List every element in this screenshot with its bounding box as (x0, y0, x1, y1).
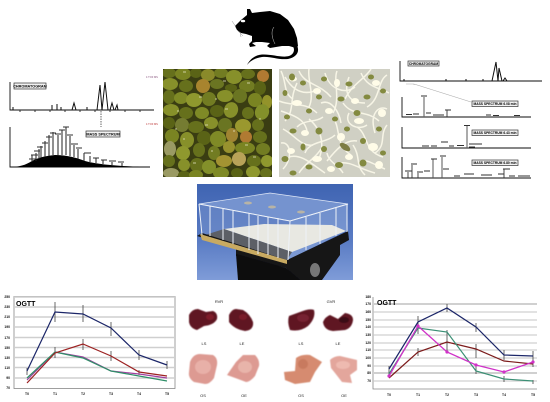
series: magenta (389, 326, 533, 376)
y axis values: 130 (4, 356, 10, 360)
mass spectrum 1 (402, 96, 531, 117)
x axis values: T1 (53, 392, 57, 396)
y axis values: 170 (4, 336, 10, 340)
y axis values: 70 (6, 386, 10, 390)
zoom connector (406, 84, 471, 102)
y axis values: 140 (365, 325, 371, 329)
chromatogram label: CHROMATOGRAM (13, 85, 47, 89)
bean highlights (175, 72, 261, 163)
y axis values: 190 (4, 325, 10, 329)
mass spectrum 2 label (472, 130, 518, 136)
photo: metabolic cage apparatus (197, 184, 353, 280)
error bars (389, 304, 533, 384)
y axis values: 70 (367, 379, 371, 383)
y axis values: 170 (365, 302, 371, 306)
peak to spectrum arrow (100, 111, 102, 127)
x axis values: T0 (387, 393, 391, 397)
right chromatogram trace (400, 61, 542, 81)
plot frame and grid (373, 297, 538, 389)
x axis values: T0 (25, 392, 29, 396)
y axis values: 80 (367, 371, 371, 375)
x axis values: T1 (416, 393, 420, 397)
group labels: OE (241, 393, 247, 398)
error bars (27, 302, 167, 375)
series: navy (27, 312, 167, 371)
chromatogram label (13, 83, 47, 89)
panel: liver photographs (189, 299, 357, 398)
y axis values: 120 (365, 341, 371, 345)
group labels: OS (298, 393, 304, 398)
series: green (389, 328, 533, 381)
x axis values: T3 (474, 393, 478, 397)
y axis values: 110 (366, 348, 371, 352)
mass spectrum label: MASS SPECTRUM (86, 133, 120, 137)
series: green (27, 352, 167, 381)
mass spectrum 1 label (472, 101, 518, 106)
x axis values: T2 (445, 393, 449, 397)
chromatogram trace (10, 82, 154, 112)
group labels: RVR (215, 299, 223, 304)
group labels: LE (240, 341, 245, 346)
mass spectrum 3 label: MASS SPECTRUM 6.80 min (473, 161, 517, 165)
icon: rat silhouette (232, 9, 298, 65)
mass spectrum label (86, 131, 120, 137)
y axis values: 160 (365, 310, 371, 314)
mass spectrum 3 (402, 156, 531, 178)
mass spectrum (10, 127, 150, 167)
y axis values: 110 (5, 366, 10, 370)
group labels: LS (202, 341, 207, 346)
chart title: OGTT (377, 300, 397, 307)
x axis values (25, 392, 169, 396)
series: navy (389, 308, 533, 369)
x axis values: T2 (81, 392, 85, 396)
y axis values: 250 (4, 295, 10, 299)
group labels: LE (336, 341, 341, 346)
group labels (200, 299, 347, 398)
mass spectrum 2 (402, 126, 531, 148)
mass spectrum 3 label (472, 160, 518, 166)
group labels: OS (200, 393, 206, 398)
group labels: OE (341, 393, 347, 398)
y axis values: 150 (365, 318, 371, 322)
panel: left chromatogram (10, 75, 158, 167)
series: purple (27, 352, 167, 380)
pale livers (189, 354, 357, 384)
dark livers (189, 309, 353, 331)
series: dark red (389, 342, 533, 378)
y axis values: 90 (6, 376, 10, 380)
group labels: GVR (327, 299, 335, 304)
y axis values: 230 (4, 305, 10, 309)
chart: right OGTT line chart (365, 295, 538, 397)
peak annotations: 1:TOF MS (146, 75, 158, 79)
y axis values: 90 (367, 364, 371, 368)
y axis values (4, 295, 10, 390)
chart title: OGTT (16, 301, 36, 308)
x axis values: T4 (502, 393, 506, 397)
mass spectrum 1 label: MASS SPECTRUM 6.08 min (473, 102, 517, 106)
photo: mung bean sprouts (279, 69, 390, 177)
chart: left OGTT line chart (4, 295, 175, 396)
peak annotations (146, 75, 158, 126)
panel: right chromatogram and spectra (400, 61, 542, 178)
y axis values: 150 (4, 346, 10, 350)
y axis values: 100 (365, 356, 371, 360)
group labels: LS (299, 341, 304, 346)
plot frame and grid (14, 296, 175, 388)
y axis values: 210 (4, 315, 10, 319)
photo: mung beans (163, 69, 272, 177)
x axis values (387, 393, 535, 397)
series: red (27, 344, 167, 383)
y axis values: 130 (365, 333, 371, 337)
x axis values: T4 (137, 392, 141, 396)
magenta markers (387, 324, 535, 378)
x axis values: T5 (531, 393, 535, 397)
x axis values: T5 (165, 392, 169, 396)
right chromatogram label: CHROMATOGRAM (409, 62, 438, 66)
mass spectrum 2 label: MASS SPECTRUM 6.43 min (473, 131, 517, 135)
peak annotations: 1:TOF MS (146, 122, 158, 126)
x axis values: T3 (109, 392, 113, 396)
y axis values: 180 (365, 295, 371, 299)
y axis values (365, 295, 371, 383)
